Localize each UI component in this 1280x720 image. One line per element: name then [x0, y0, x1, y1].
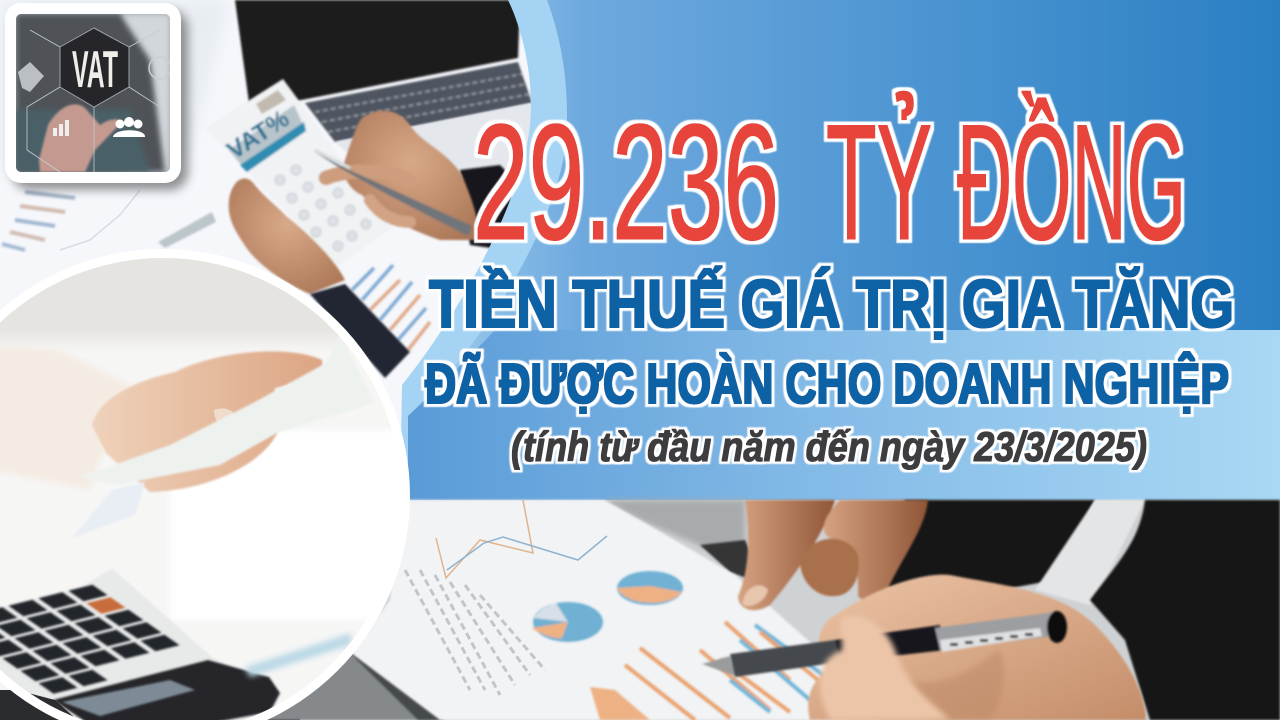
fountain pen — [702, 611, 1067, 677]
calculator display end — [53, 660, 280, 720]
orange arrow shape — [590, 687, 650, 720]
hand with receipts — [92, 351, 322, 492]
thumbnail drop shadow — [12, 10, 188, 190]
headline: 29.236 tỷ đồng: 29.236 — [473, 90, 779, 274]
thumb over pen — [820, 616, 950, 720]
line chart on paper — [436, 500, 607, 578]
laptop edge strip — [345, 648, 445, 720]
hand shadow creases — [900, 650, 1004, 720]
thumbnail: VAT concept photo — [5, 3, 188, 190]
laptop keyboard — [305, 62, 532, 142]
icon: handshake — [18, 62, 44, 92]
writing hand — [808, 575, 1146, 720]
keyboard at paper top right — [604, 500, 745, 565]
hexagon network lines — [27, 30, 165, 172]
headline: 29.236 tỷ đồng: TỶ — [826, 90, 932, 274]
date note: (tính từ đầu năm đến ngày 23/3/2025) — [511, 423, 1147, 470]
hexagon with VAT: VAT — [72, 41, 118, 99]
dark background at upper right — [860, 500, 1095, 590]
laptop base — [335, 103, 540, 190]
pointing fingers — [738, 500, 928, 610]
fingernail — [214, 408, 234, 422]
dark jacket sleeve — [310, 284, 410, 378]
calculator keys — [0, 585, 198, 694]
blue panel background — [400, 0, 1280, 500]
dark lower left corner — [0, 690, 300, 720]
icon: bar chart — [53, 120, 69, 136]
calculator — [205, 79, 392, 266]
white circle frame — [0, 249, 410, 720]
pen on calculator — [312, 150, 472, 236]
black block behind pen — [460, 165, 525, 250]
keyboard at lower left — [250, 640, 440, 720]
faint bar charts on paper — [2, 192, 75, 250]
chart bars beside the sleeve — [352, 265, 430, 350]
photo: desk with laptop, calculator and hands — [0, 0, 560, 420]
photo: paper chart, hands and pen on dark background — [0, 500, 1280, 720]
pie chart right — [617, 571, 683, 605]
table of figures on paper — [405, 570, 545, 695]
sleeve of white shirt — [0, 345, 130, 490]
pie chart left — [532, 602, 603, 642]
circular photo: hand with receipts and calculator — [0, 245, 420, 720]
laptop screen — [235, 0, 520, 110]
lower lighter band — [408, 330, 1280, 500]
thumbnail white frame — [5, 3, 181, 183]
white document — [170, 430, 410, 620]
icon: globe — [149, 57, 171, 79]
light arc band — [400, 0, 640, 500]
hexagon with VAT — [60, 28, 129, 107]
chart paper — [351, 500, 880, 720]
paper receipts — [84, 364, 324, 482]
dark base under calculator — [30, 693, 74, 717]
bar chart on paper — [625, 622, 830, 720]
icon: people — [113, 117, 145, 137]
top blue gradient area — [408, 0, 1280, 500]
right hand with pen over panel edge — [312, 111, 478, 240]
calculator body — [0, 568, 280, 720]
left hand holding calculator — [229, 178, 345, 294]
text: VAT% on calculator display: VAT% — [222, 105, 294, 165]
